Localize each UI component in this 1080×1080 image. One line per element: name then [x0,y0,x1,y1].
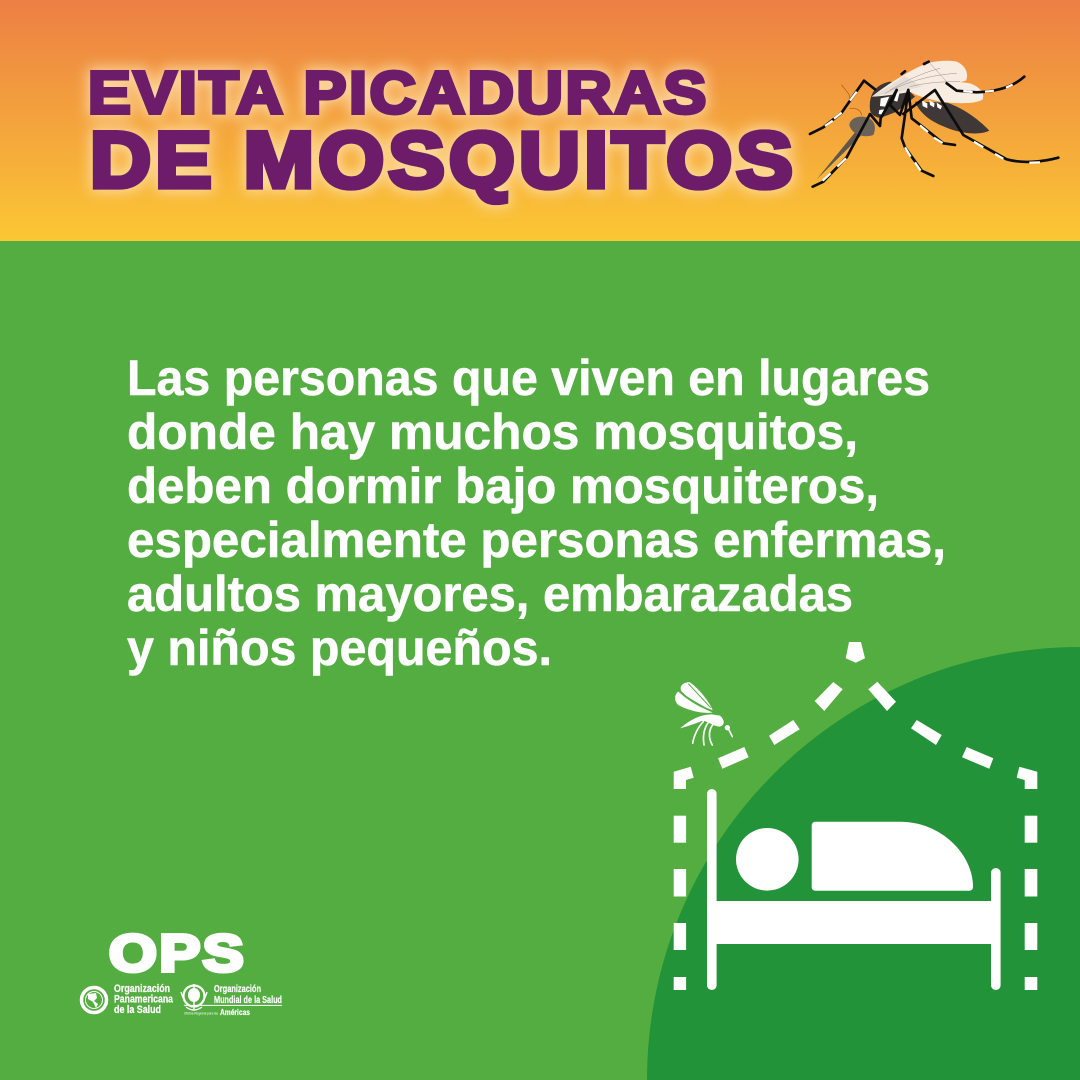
WHO name: Organización [214,983,261,995]
title: DE MOSQUITOS [90,115,797,204]
WHO name: Mundial de la Salud [214,994,282,1006]
title [88,60,797,204]
icon: mosquito illustration [810,61,1058,187]
legs [810,62,1058,187]
green background [0,241,1080,1080]
PAHO name [114,983,174,1016]
body text: Las personas que viven en lugares [127,350,930,406]
PAHO emblem [82,988,106,1012]
PAHO name: de la Salud [114,1004,161,1016]
body text: donde hay muchos mosquitos, [127,404,858,460]
icon: small white mosquito [675,682,732,745]
icon: bed with sleeping person [707,789,1001,990]
PAHO name: Organización [114,983,170,995]
icon: bed net [674,642,1037,990]
WHO name: Oficina Regional para las [184,1012,218,1016]
WHO emblem [181,984,207,1010]
logo wordmark: OPS [109,925,246,983]
body text [127,350,946,676]
title: EVITA PICADURAS [88,60,709,126]
dark green arc [647,647,1080,1080]
PAHO name: Panamericana [114,994,174,1006]
body text: especialmente personas enfermas, [127,512,946,568]
WHO name: Américas [220,1008,250,1017]
hind wing [910,82,983,103]
body text: y niños pequeños. [127,620,552,676]
body text: deben dormir bajo mosquiteros, [127,458,879,514]
fore wing [872,61,967,97]
body text: adultos mayores, embarazadas [127,566,853,622]
header band [0,0,1080,241]
WHO name [184,983,282,1017]
OPS logo [82,925,282,1017]
